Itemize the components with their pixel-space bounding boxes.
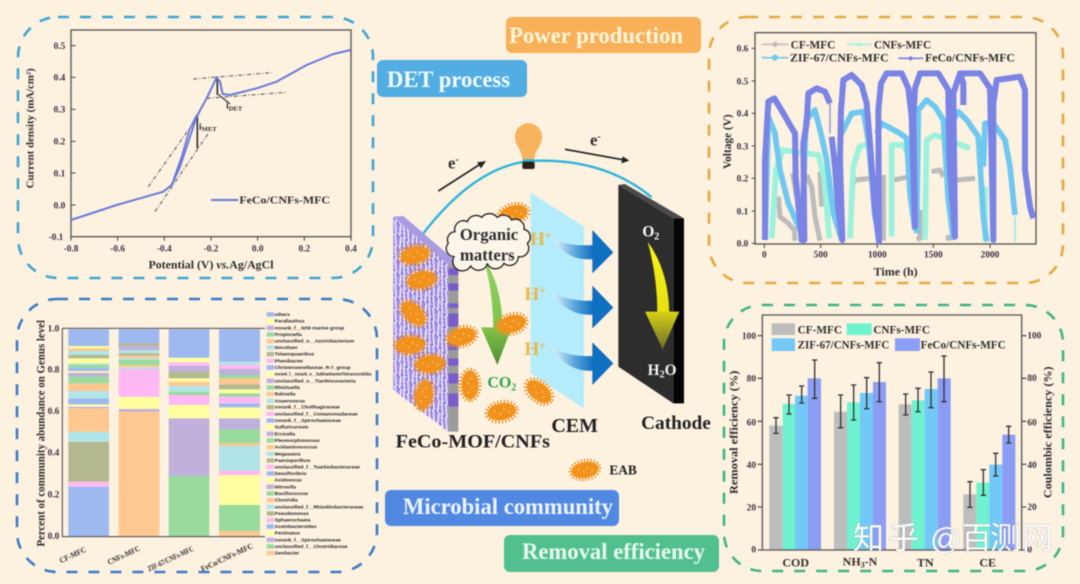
H2O label: O — [665, 362, 677, 379]
series: CNFs-MFC — [772, 135, 985, 240]
label: Removal efficiency — [504, 535, 719, 572]
cathode plate — [618, 184, 684, 403]
genus legend: Rahnella — [275, 392, 296, 398]
chart legend: CNFs-MFC — [874, 39, 931, 51]
genus legend: Geobacter — [275, 551, 299, 557]
H+ labels: H — [524, 339, 539, 360]
panel: DET process chart — [18, 17, 373, 278]
panel: power production chart — [709, 17, 1063, 283]
O2 label: 2 — [654, 231, 659, 242]
panel: removal efficiency chart — [724, 305, 1063, 571]
CO2 label: 2 — [511, 382, 516, 393]
CO2 label: CO — [487, 375, 511, 392]
iMET and iDET markers: MET — [202, 126, 217, 133]
error bars — [773, 356, 1011, 507]
axis ticks and labels: 0.4 — [54, 74, 66, 84]
genus legend: Pectinatus — [275, 531, 300, 537]
genus legend: norank_f__Chollhagiraceae — [275, 405, 340, 411]
H+ labels: H — [524, 284, 539, 305]
chart legend: ZIF-67/CNFs-MFC — [790, 52, 889, 64]
H+ labels — [524, 229, 552, 360]
CEM label: CEM — [551, 415, 598, 437]
central MFC diagram — [393, 123, 711, 482]
genus legend: unclassified_o__Azoriobacterium — [275, 339, 355, 345]
electron labels: e — [590, 131, 597, 150]
genus legend: unclassified_f__Rhizobiobacteraceae — [275, 504, 364, 510]
proton arrow 1 — [553, 230, 613, 273]
right axis title: Coulombic efficiency (%) — [1043, 366, 1055, 498]
axis ticks and labels: 0.4 — [345, 244, 357, 254]
genus legend: Ercicella — [275, 431, 295, 437]
label: Microbial community — [385, 490, 619, 526]
genus legend: Pleomorphomonas — [275, 438, 320, 444]
genus legend: Phenibacter — [275, 358, 303, 364]
series: ZIF-67/CNFs-MFC — [765, 100, 1015, 242]
genus legend: norank_f__norank_o__Subhaeibacter/Tetracoccobibia — [275, 372, 371, 378]
axis ticks and labels: 1500 — [924, 251, 943, 261]
chart legend — [762, 39, 1015, 64]
label: DET process — [377, 60, 527, 97]
series: FeCo/CNFs-MFC — [765, 73, 1033, 242]
electron labels: - — [597, 132, 601, 143]
right axis labels: 60 — [1027, 419, 1037, 429]
axis ticks and labels: 0.1 — [737, 207, 749, 217]
genus legend: norank_f__Spirochaetaceae — [275, 418, 341, 424]
iMET and iDET markers: DET — [229, 105, 243, 112]
category labels — [782, 555, 996, 570]
chart legend: CF-MFC — [798, 323, 842, 337]
axis ticks and labels: -0.2 — [204, 244, 219, 254]
label: Microbial community: Microbial community — [403, 494, 613, 519]
axis ticks and labels: 0 — [762, 251, 767, 261]
axis ticks and labels: 0.2 — [298, 244, 310, 254]
watermark: 知乎@百测网 — [853, 521, 1053, 556]
cloud: organic matters: matters — [460, 246, 515, 265]
label: Removal efficiency: Removal efficiency — [522, 539, 705, 564]
iMET and iDET markers: i — [226, 102, 229, 112]
stacked bar: ZIF-67/CNFs-MFC — [169, 329, 209, 536]
H+ labels: + — [539, 285, 546, 297]
electron labels: e — [448, 153, 455, 172]
iMET and iDET markers — [197, 77, 243, 148]
axis ticks and labels: 0.2 — [737, 175, 749, 185]
icon: light bulb — [515, 123, 542, 169]
axes: 0.0 — [48, 532, 60, 542]
genus legend: norank_f__NS9 marine group — [275, 325, 344, 331]
genus legend: Clostridia — [275, 498, 298, 504]
axis ticks and labels: 0.4 — [737, 110, 749, 120]
genus legend: Rhishuella — [275, 385, 300, 391]
genus legend: unclassified_f__Tuarkiobacteraceae — [275, 464, 360, 470]
left axis labels: 20 — [747, 504, 756, 514]
right axis labels — [1027, 331, 1042, 555]
x axis title: Time (h) — [874, 264, 918, 278]
iMET and iDET markers: i — [199, 122, 202, 132]
axis ticks and labels: 0.5 — [737, 77, 749, 87]
category labels: CNFs-MFC — [106, 544, 142, 567]
genus legend: Propionella — [275, 332, 302, 338]
electron labels: - — [455, 154, 459, 165]
series: CF-MFC — [778, 170, 975, 241]
H2O label: 2 — [660, 370, 665, 381]
axes — [48, 324, 265, 542]
legend: FeCo/CNFs-MFC — [239, 194, 330, 206]
axis ticks and labels: 0.3 — [54, 106, 66, 116]
y axis title: Percent of community abundance on Genus level — [35, 320, 47, 547]
genus legend: Acidovorax — [275, 478, 302, 484]
genus legend: Anaerovorax — [275, 398, 305, 404]
genus legend: Sphaerochaeta — [275, 518, 311, 524]
axes: 1.0 — [48, 324, 60, 334]
proton arrow 3 — [552, 342, 613, 385]
panel: microbial community chart — [17, 299, 377, 573]
Cathode label: Cathode — [641, 413, 711, 434]
H2O label: H — [648, 362, 660, 379]
x axis title: Potential (V) vs.Ag/AgCl — [148, 257, 274, 271]
axes: 0.2 — [48, 490, 60, 500]
left axis labels: 80 — [747, 375, 756, 385]
genus legend: Paenisporillum — [275, 458, 311, 464]
H+ labels: H — [530, 229, 545, 250]
genus legend: Parallauthus — [275, 319, 305, 325]
bars: ZIF-67/CNFs-MFC — [795, 389, 1002, 550]
anode label: FeCo-MOF/CNFs — [396, 431, 550, 452]
category labels — [58, 541, 255, 573]
arrow: O2 to H2O — [645, 242, 679, 349]
axis ticks and labels: 0.0 — [54, 201, 66, 211]
axis ticks and labels: 0.2 — [54, 138, 66, 148]
genus legend: others — [275, 312, 290, 318]
axis ticks and labels: 0.0 — [737, 240, 749, 250]
category labels: CE — [979, 556, 996, 570]
bacteria colony — [394, 242, 557, 424]
plot frame — [71, 30, 351, 237]
axis ticks and labels: 1000 — [868, 251, 887, 261]
right axis labels: 80 — [1027, 374, 1037, 384]
genus legend: unclassified_o__Tianfeivuvacteria — [275, 378, 356, 384]
left axis labels — [742, 332, 756, 555]
bars: CNFs-MFC — [783, 400, 989, 550]
stacked bar: FeCo/CNFs-MFC — [219, 329, 260, 536]
genus legend: Nitrosilla — [275, 484, 296, 490]
axis ticks and labels: 0.5 — [54, 42, 66, 52]
right axis labels: 0 — [1027, 545, 1032, 555]
axes: 0.8 — [48, 365, 60, 375]
axis ticks and labels: -0.1 — [49, 233, 64, 243]
label: Power production — [506, 17, 701, 53]
label: Power production: Power production — [509, 23, 683, 48]
genus legend: Desulfovibrio — [275, 471, 307, 477]
H+ labels: + — [545, 230, 552, 242]
y axis title: Current density (mA/cm²) — [24, 68, 36, 188]
genus legend: unclassified_f__Comamonadaceae — [275, 411, 358, 417]
genus legend: Nocohaer — [275, 345, 298, 351]
plot frame and ticks — [758, 315, 1026, 550]
axis ticks and labels: -0.8 — [64, 244, 79, 254]
left axis title: Removal efficiency (%) — [728, 370, 740, 494]
axis ticks and labels: 0.3 — [737, 142, 749, 152]
axis ticks and labels: 0.0 — [252, 244, 264, 254]
legend: EAB — [569, 458, 637, 482]
genus legend: Bacillococcus — [275, 491, 308, 497]
genus legend: Acetobacteroides — [275, 524, 317, 530]
category labels: FeCo/CNFs-MFC — [199, 541, 255, 573]
genus legend: Megasaera — [275, 451, 301, 457]
bacterium top — [496, 201, 531, 227]
axes: 0.6 — [48, 407, 60, 417]
arrow: electron flow right — [565, 149, 629, 163]
axis ticks and labels: 500 — [814, 251, 828, 261]
axis ticks and labels: 0.1 — [54, 169, 66, 179]
stacked bar: CNFs-MFC — [119, 329, 159, 536]
genus legend: Pseudomonas — [275, 511, 309, 517]
genus legend: Christensenellaceae_R-7_group — [275, 365, 351, 371]
polarization curve — [71, 50, 351, 220]
genus legend: Sulfuricurvum — [275, 425, 309, 431]
category labels: 3 — [861, 561, 865, 570]
left axis labels: 60 — [747, 419, 756, 429]
arrow: electron flow left — [438, 161, 486, 191]
category labels: ZIF-67/CNFs-MFC — [146, 544, 195, 573]
chart legend: ZIF-67/CNFs-MFC — [798, 338, 889, 352]
axis ticks and labels: 2000 — [981, 251, 1000, 261]
chart legend: FeCo/CNFs-MFC — [921, 338, 1006, 352]
bars: CF-MFC — [769, 404, 976, 550]
axis ticks and labels: -0.4 — [157, 244, 172, 254]
axis ticks and labels: -0.6 — [110, 244, 125, 254]
genus legend — [267, 312, 371, 557]
y axis title: Voltage (V) — [722, 114, 734, 169]
arrow: organic matter to CO2 — [481, 260, 512, 365]
label: DET process: DET process — [387, 67, 510, 92]
bars: FeCo/CNFs-MFC — [808, 378, 1015, 550]
right axis labels: 40 — [1027, 461, 1037, 471]
proton arrow 2 — [552, 286, 613, 328]
right axis labels: 100 — [1027, 331, 1042, 341]
category labels: NH — [843, 555, 861, 569]
O2 label: O — [642, 224, 654, 241]
genus legend: Tolaenquaeribus — [275, 352, 314, 358]
tangent guide lines — [148, 73, 287, 212]
external circuit wire — [423, 161, 652, 233]
genus legend: unclassified_f__Clostridiaceae — [275, 544, 348, 550]
legend: EAB: EAB — [609, 463, 637, 478]
axis ticks and labels: 0.6 — [737, 45, 749, 55]
chart legend — [772, 323, 1006, 352]
right axis labels: 20 — [1027, 503, 1037, 513]
left axis labels: 40 — [747, 461, 756, 471]
plot frame — [755, 33, 1036, 244]
anode: FeCo-MOF/CNFs — [393, 216, 458, 432]
genus legend: Acidaminococcus — [275, 445, 318, 451]
cloud: organic matters: Organic — [460, 225, 518, 244]
chart legend: CNFs-MFC — [873, 323, 930, 337]
category labels: CF-MFC — [58, 545, 88, 565]
chart legend: CF-MFC — [791, 39, 835, 51]
cloud: organic matters — [446, 214, 530, 271]
left axis labels: 0 — [751, 545, 756, 555]
electron labels — [448, 131, 601, 172]
left axis labels: 100 — [742, 332, 756, 342]
membrane: CEM — [531, 193, 584, 408]
genus legend: norank_f__Spirochaetaceae — [275, 537, 341, 543]
axes: 0.4 — [48, 449, 60, 459]
chart legend: FeCo/CNFs-MFC — [925, 52, 1015, 64]
category labels: -N — [865, 555, 878, 569]
stacked bar: CF-MFC — [68, 329, 109, 536]
axis ticks and labels — [737, 45, 1000, 261]
H+ labels: + — [539, 340, 546, 352]
category labels: TN — [917, 556, 934, 570]
axis ticks and labels — [49, 42, 357, 254]
category labels: COD — [782, 556, 809, 570]
